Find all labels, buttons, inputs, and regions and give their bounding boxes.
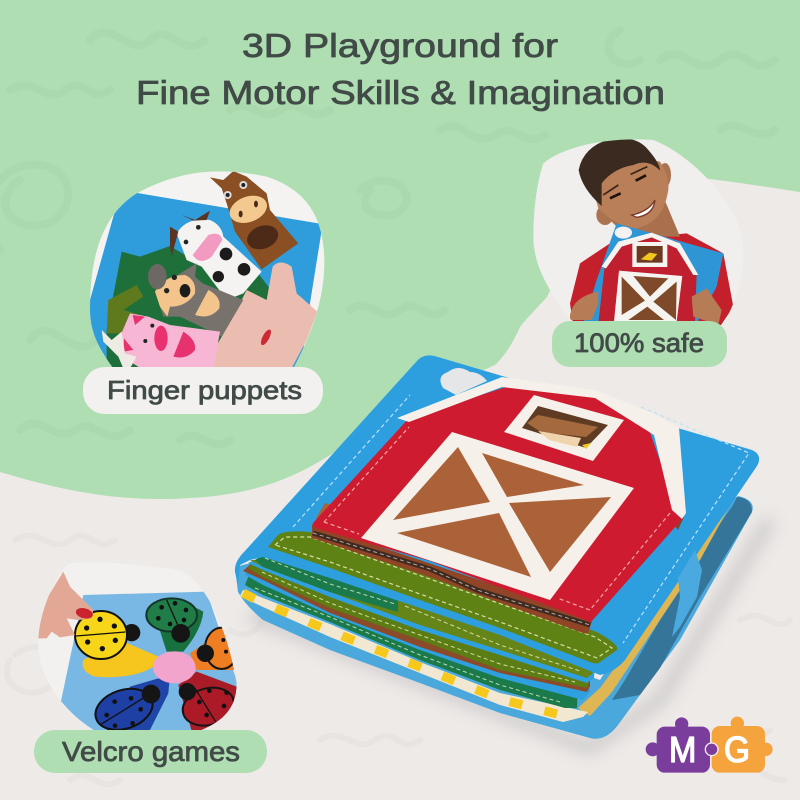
page layer: dark green (245, 558, 578, 708)
dog puppet (148, 263, 243, 337)
cloud (440, 368, 487, 395)
barn door (614, 271, 682, 322)
farmer in window (527, 415, 598, 437)
panel: smiling boy with book (534, 140, 733, 325)
red barn on book (598, 235, 697, 323)
orange petal and ladybug (190, 626, 234, 670)
grass (268, 531, 617, 664)
barn door panels (393, 447, 611, 577)
yellow checker strip (240, 590, 588, 722)
eave shadow (670, 510, 684, 530)
logo: MG puzzle pieces (646, 717, 773, 773)
blue felt page (90, 193, 321, 373)
red petal and ladybug (178, 672, 236, 730)
yellow petal (83, 640, 158, 677)
label: 100% safe (552, 321, 727, 367)
blue felt book (583, 223, 723, 323)
horse puppet (210, 171, 298, 269)
red t-shirt (570, 233, 733, 327)
back cover dark right side (612, 497, 752, 700)
page layer: dark green flap (255, 555, 398, 612)
photo backdrop (90, 172, 324, 367)
page layer: blue edge (248, 558, 595, 683)
label: velcro games (34, 730, 267, 773)
window (504, 395, 624, 461)
red fingernail (260, 330, 271, 346)
panel: finger puppets photo (90, 172, 324, 367)
cloud (615, 227, 632, 239)
page layer: thin blue (245, 558, 590, 700)
white fence (102, 330, 137, 368)
background: green upper wave (0, 0, 800, 499)
light blue felt page (53, 592, 240, 737)
back cover and spine (235, 496, 753, 739)
red fingernail (75, 606, 94, 620)
label: velcro games: Velcro games (62, 736, 240, 767)
barn window (632, 242, 667, 267)
label: finger puppets (83, 367, 323, 414)
barn roof (397, 377, 686, 519)
ears (596, 208, 612, 225)
title: 3D Playground for (242, 27, 558, 64)
cover stitching (293, 395, 749, 643)
eyes and brows (603, 167, 647, 195)
strap (672, 550, 702, 637)
hair (579, 138, 660, 206)
page layer: upper olive (250, 558, 597, 678)
page layer: brown (243, 558, 590, 692)
barn roof (602, 233, 698, 275)
orange G piece: G (724, 729, 750, 770)
hands (570, 292, 598, 320)
barn stitching (324, 427, 670, 610)
photo backdrop (534, 140, 708, 290)
panel: velcro ladybug game (38, 572, 237, 730)
title (136, 27, 665, 111)
green petal and ladybug (146, 598, 203, 652)
photo backdrop (38, 644, 62, 688)
main product: felt quiet book with barn cover (235, 355, 770, 748)
blue petal and ladybug (94, 678, 170, 730)
red barn body (313, 387, 684, 622)
top cover (235, 355, 759, 675)
pig puppet (122, 313, 220, 367)
background squiggle pattern on off-white (7, 536, 790, 784)
page edges right (578, 511, 727, 716)
barn base (312, 524, 593, 634)
book shadow (250, 520, 770, 748)
label: finger puppets: Finger puppets (107, 375, 302, 405)
purple M piece: M (669, 729, 696, 770)
photo blob (534, 140, 733, 325)
hand holding ladybug (38, 572, 93, 638)
page layer: lower olive (248, 558, 590, 688)
face (596, 160, 668, 228)
smile (632, 200, 655, 217)
hand (213, 262, 317, 368)
cow puppet (170, 211, 262, 300)
pink centre circle (153, 651, 196, 683)
olive felt patch (107, 285, 147, 333)
barn door frame (361, 432, 634, 600)
green felt hill (106, 246, 269, 367)
neck (612, 202, 680, 237)
barn side brown (316, 503, 332, 520)
label: 100% safe: 100% safe (574, 328, 704, 358)
background squiggle pattern on green (0, 30, 775, 444)
yellow ladybug (75, 611, 140, 659)
title: Fine Motor Skills & Imagination (136, 74, 665, 111)
